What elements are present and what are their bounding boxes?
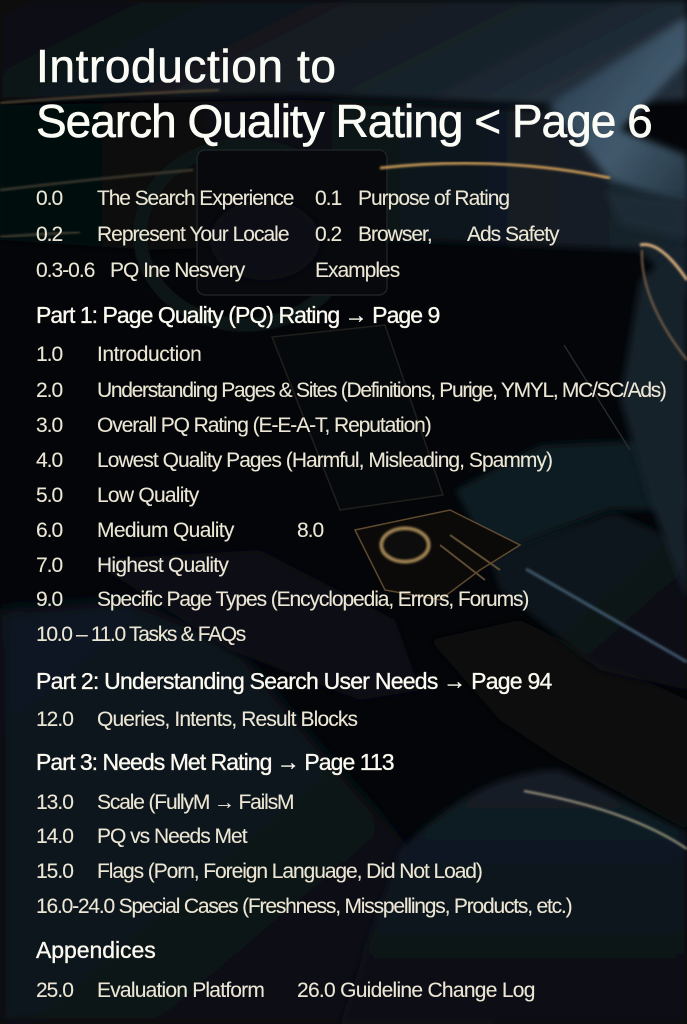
section: introduction entries: 0.2 xyxy=(315,223,341,246)
title xyxy=(36,40,652,147)
title: Search Quality Rating < Page 6 xyxy=(36,95,652,147)
section: introduction entries xyxy=(36,187,560,282)
section: introduction entries: Purpose of Rating xyxy=(358,187,509,210)
section: part 2 entries: 12.0 xyxy=(36,708,73,731)
section: introduction entries: 0.2 xyxy=(36,223,62,246)
section: part 1 entries xyxy=(36,343,666,646)
section: part 3 entries: PQ vs Needs Met xyxy=(97,825,247,848)
section: part 1 entries: 2.0 xyxy=(36,379,62,402)
heading: appendices: Appendices xyxy=(36,937,156,963)
section: part 1 entries: Specific Page Types (Encyclopedia, Errors, Forums) xyxy=(97,588,528,611)
section: part 3 entries: 13.0 xyxy=(36,791,73,814)
steering wheel and screens xyxy=(140,145,350,325)
section: introduction entries: Examples xyxy=(315,259,399,282)
section: part 1 entries: 3.0 xyxy=(36,414,62,437)
section: part 1 entries: 7.0 xyxy=(36,554,62,577)
cup holder console xyxy=(355,510,520,600)
section: part 1 entries: 6.0 xyxy=(36,519,62,542)
section: part 1 entries: Medium Quality xyxy=(97,519,234,542)
section: appendices entries: Evaluation Platform xyxy=(97,979,264,1002)
section: appendices entries: 25.0 xyxy=(36,979,73,1002)
section: part 1 entries: Highest Quality xyxy=(97,554,228,577)
section: part 1 entries: Introduction xyxy=(97,343,201,366)
section: part 3 entries: 15.0 xyxy=(36,860,73,883)
heading: part 1: Part 1: Page Quality (PQ) Rating → Page 9 xyxy=(36,302,439,328)
section: part 1 entries: Understanding Pages & Sites (Definitions, Purige, YMYL, MC/SC/Ads) xyxy=(97,379,666,402)
heading: part 2: Part 2: Understanding Search User Needs → Page 94 xyxy=(36,668,552,694)
section: part 3 entries: 14.0 xyxy=(36,825,73,848)
section: part 1 entries: Lowest Quality Pages (Harmful, Misleading, Spammy) xyxy=(97,449,552,472)
section: part 1 entries: 4.0 xyxy=(36,449,62,472)
title: Introduction to xyxy=(36,40,337,92)
section: part 1 entries: 1.0 xyxy=(36,343,62,366)
section: appendices entries xyxy=(36,979,535,1002)
section: part 3 entries: Flags (Porn, Foreign Language, Did Not Load) xyxy=(97,860,482,883)
section: introduction entries: PQ Ine Nesvery xyxy=(110,259,244,282)
heading: part 3: Part 3: Needs Met Rating → Page 113 xyxy=(36,749,394,775)
section: part 3 entries: 16.0-24.0 Special Cases (Freshness, Misspellings, Products, etc.) xyxy=(36,895,571,918)
section: part 1 entries: Low Quality xyxy=(97,484,198,507)
section: part 1 entries: Overall PQ Rating (E-E-A-T, Reputation) xyxy=(97,414,431,437)
section: part 1 entries: 8.0 xyxy=(297,519,323,542)
section: part 1 entries: 5.0 xyxy=(36,484,62,507)
section: introduction entries: Browser, xyxy=(358,223,432,246)
section: appendices entries: 26.0 Guideline Change Log xyxy=(297,979,535,1002)
section: part 3 entries: Scale (FullyM → FailsM xyxy=(97,791,293,814)
section: introduction entries: 0.3-0.6 xyxy=(36,259,94,282)
section: part 1 entries: 9.0 xyxy=(36,588,62,611)
section: introduction entries: 0.0 xyxy=(36,187,62,210)
section: part 2 entries: Queries, Intents, Result Blocks xyxy=(97,708,357,731)
section: introduction entries: Ads Safety xyxy=(467,223,559,246)
section: introduction entries: 0.1 xyxy=(315,187,341,210)
section: part 1 entries: 10.0 – 11.0 Tasks & FAQs xyxy=(36,623,245,646)
section: introduction entries: The Search Experience xyxy=(97,187,293,210)
section: introduction entries: Represent Your Locale xyxy=(97,223,288,246)
section: part 3 entries xyxy=(36,791,572,918)
